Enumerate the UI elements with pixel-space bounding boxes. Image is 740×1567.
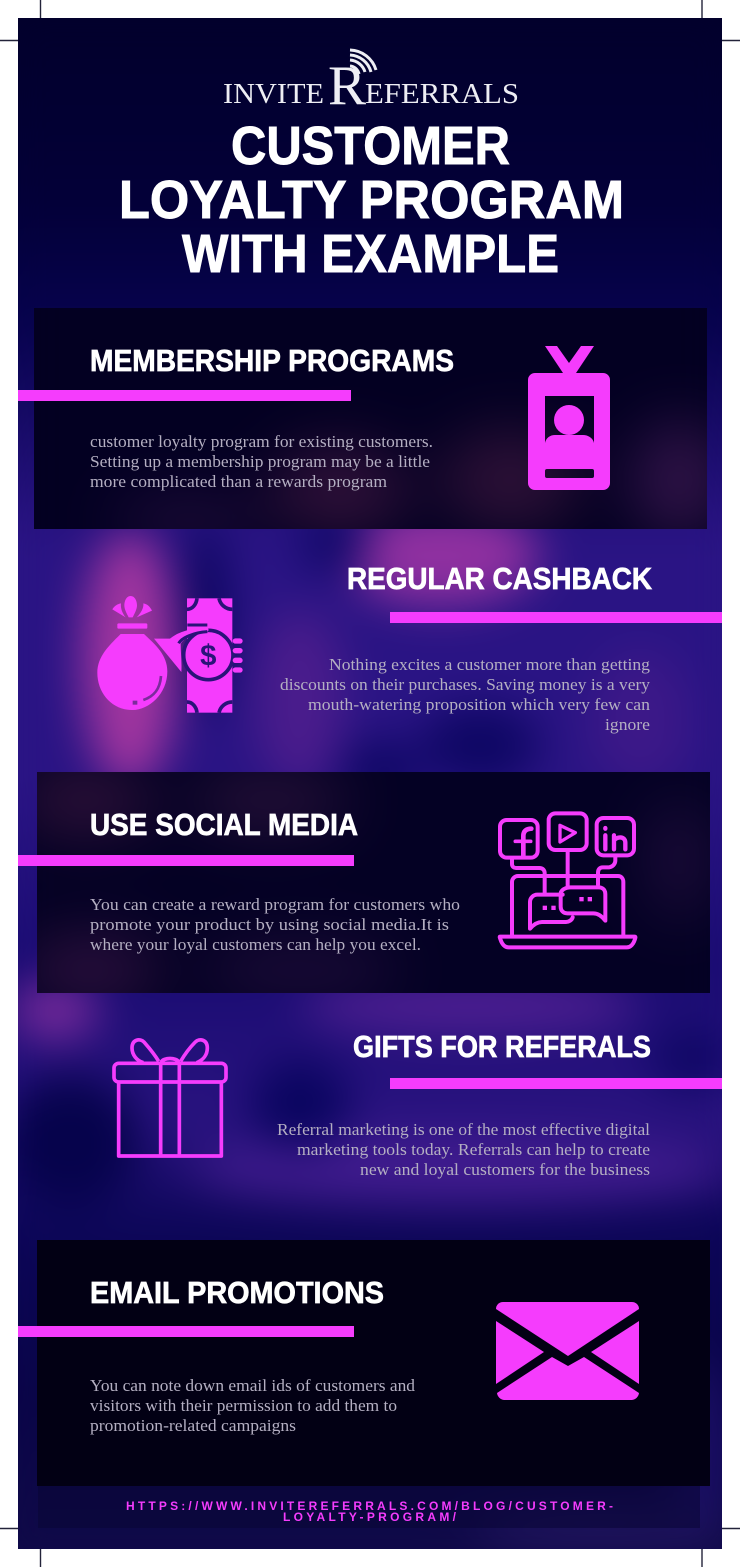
body text: more complicated than a rewards program — [90, 472, 387, 491]
bar — [18, 855, 354, 866]
body text: ignore — [605, 715, 650, 734]
footer url — [126, 1499, 613, 1524]
heading: gifts for referals: GIFTS FOR REFERALS — [353, 1029, 651, 1064]
body text: Referral marketing is one of the most effective digital — [277, 1120, 650, 1139]
body text — [90, 895, 460, 954]
panel: use social media — [18, 772, 710, 993]
body text: marketing tools today. Referrals can help to create — [297, 1140, 650, 1159]
icon: money bag and banknote — [97, 596, 243, 713]
icon: envelope — [496, 1302, 639, 1400]
title: WITH EXAMPLE — [182, 224, 559, 284]
logo: Invite Referrals: EFERRALS — [365, 78, 519, 110]
body text: customer loyalty program for existing customers. — [90, 432, 433, 451]
title: LOYALTY PROGRAM — [119, 170, 624, 230]
body text — [280, 655, 651, 734]
heading: membership programs: MEMBERSHIP PROGRAMS — [90, 343, 454, 378]
icon: money bag and banknote: $ — [200, 639, 216, 672]
body text: discounts on their purchases. Saving money is a very — [280, 675, 651, 694]
footer url: LOYALTY-PROGRAM/ — [283, 1510, 457, 1524]
title — [119, 116, 624, 284]
bar — [18, 390, 351, 401]
hand — [154, 627, 209, 672]
body text — [90, 1376, 416, 1435]
bar — [390, 612, 722, 623]
body text: where your loyal customers can help you excel. — [90, 935, 421, 954]
bar — [390, 1078, 722, 1089]
icon: social media laptop — [500, 813, 635, 947]
body text: promote your product by using social media.It is — [90, 915, 449, 934]
body text: Nothing excites a customer more than getting — [329, 655, 651, 674]
panel: regular cashback — [97, 561, 722, 734]
logo: Invite Referrals — [223, 50, 519, 117]
title: CUSTOMER — [231, 116, 510, 176]
bar — [18, 1326, 354, 1337]
heading: email promotions: EMAIL PROMOTIONS — [90, 1275, 384, 1310]
banknote corners — [187, 598, 232, 713]
footer band — [38, 1486, 700, 1528]
panel: membership programs — [18, 308, 707, 529]
coin — [184, 630, 233, 680]
bag highlight — [143, 676, 161, 700]
body text: Setting up a membership program may be a little — [90, 452, 430, 471]
logo: Invite Referrals: INVITE — [223, 78, 324, 110]
panel: email promotions — [18, 1240, 710, 1486]
body text — [277, 1120, 650, 1179]
logo: Invite Referrals: R — [328, 55, 367, 117]
icon: gift box — [114, 1040, 226, 1156]
body text: promotion-related campaigns — [90, 1416, 296, 1435]
icon: id badge — [528, 346, 610, 490]
body text: visitors with their permission to add them to — [90, 1396, 397, 1415]
body text: You can note down email ids of customers and — [90, 1376, 416, 1395]
body text: mouth-watering proposition which very few can — [308, 695, 651, 714]
body text: new and loyal customers for the business — [360, 1160, 650, 1179]
body text — [90, 432, 433, 491]
heading: regular cashback: REGULAR CASHBACK — [347, 561, 653, 596]
footer url: HTTPS://WWW.INVITEREFERRALS.COM/BLOG/CUSTOMER- — [126, 1499, 613, 1513]
body text: You can create a reward program for customers who — [90, 895, 460, 914]
panel: gifts for referals — [114, 1029, 722, 1179]
heading: use social media: USE SOCIAL MEDIA — [90, 807, 358, 842]
